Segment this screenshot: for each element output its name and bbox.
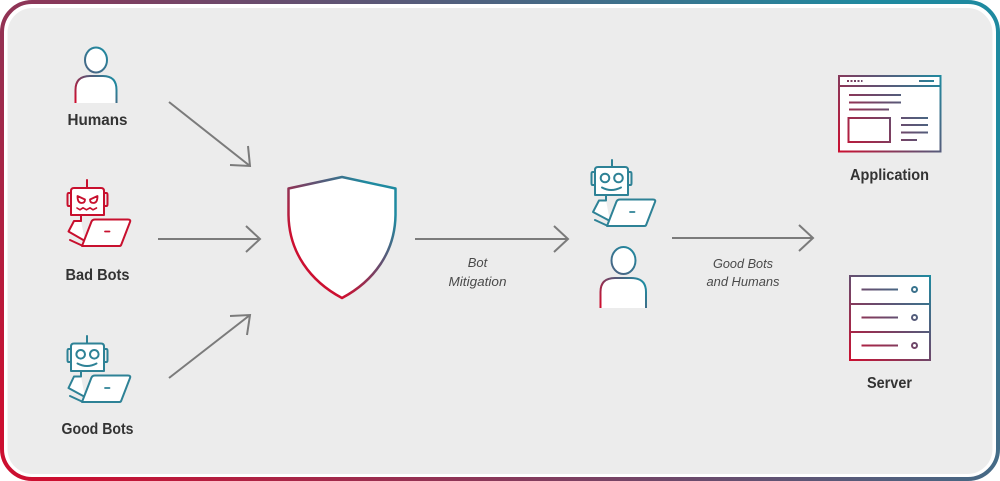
icon: server [850,276,930,360]
label: humans: Humans [68,112,128,129]
label: good bots and humans: and Humans [706,274,780,289]
label: application: Application [850,167,929,184]
icon: application window [839,76,940,152]
label: bot mitigation: Mitigation [448,274,506,289]
arrow: humans to shield [169,102,250,166]
icon: human [76,48,116,103]
label: bot mitigation: Bot [468,255,489,270]
icon: bad bot [68,180,130,246]
arrow: traffic to destinations [672,225,813,251]
icon: allowed human [600,247,646,308]
icon: shield [288,177,396,298]
label: bad bots: Bad Bots [66,267,130,284]
icon: good bot [68,336,130,402]
arrow: bad bots to shield [158,226,260,252]
icon: allowed good bot [592,160,655,226]
label: good bots and humans: Good Bots [713,256,773,271]
label: server: Server [867,375,912,392]
label: good bots: Good Bots [62,421,134,438]
arrow: shield to filtered traffic [415,226,568,252]
arrow: good bots to shield [169,315,250,378]
